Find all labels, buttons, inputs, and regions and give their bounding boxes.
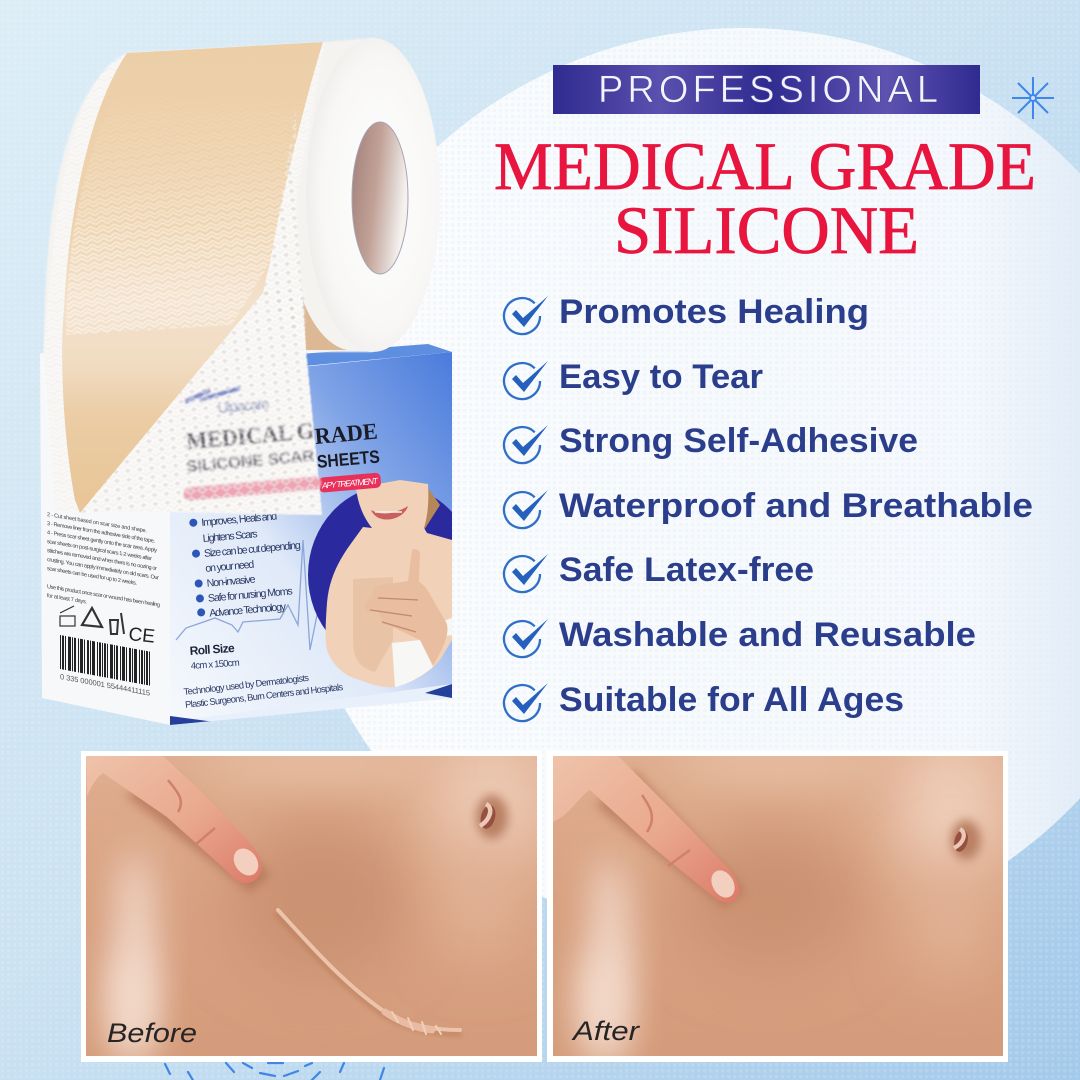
finger [553,756,745,908]
transparent film [42,42,325,515]
technology note: Plastic Surgeons, Burn Centers and Hospitals [184,681,344,710]
feature list [504,293,1033,721]
icon: period after opening [60,606,75,626]
roll body [44,38,373,515]
roll size: 4cm x 150cm [190,658,240,672]
feature bullets on box: Improves, Heals and [201,510,278,529]
barcode: 0 335 000001 55444411115 [60,672,150,698]
feature bullets on box: Safe for nursing Moms [207,585,293,605]
roll end disc [306,38,440,352]
label: before: Before [107,1018,197,1048]
item: washable and reusable: Washable and Reusable [559,616,976,654]
title: SILICONE [614,192,919,268]
scar [277,910,460,1034]
icon: sparkle star [1012,77,1054,119]
roll core hole [352,122,408,274]
panel: before photo [81,730,550,1062]
box side panel: stitches are removed and when there is no oozing or [47,548,157,572]
icon: waste bin [110,613,124,634]
banner: professional [553,65,980,114]
item: strong self-adhesive: Strong Self-Adhesive [559,422,918,460]
tan backing sheet [62,42,323,513]
icon: recycling [82,608,102,627]
navel [476,795,508,839]
label: after: After [571,1016,640,1046]
box side panel: 4 - Press scar sheet gently onto the scar area. Apply [47,530,157,554]
box side panel [40,353,170,725]
decorative dashes under photos [165,1063,384,1080]
box title right part: APY TREATMENT [321,476,379,491]
box front panel [170,352,476,730]
ecg line [176,540,320,650]
box title right part: RADE [314,419,379,449]
product box [40,344,476,730]
roll size [190,644,240,669]
feature bullets on box: Lightens Scars [202,528,258,545]
item: safe latex-free: Safe Latex-free [559,551,814,589]
box side panel: 2 - Cut sheet based on scar size and shape. [47,512,147,535]
title: MEDICAL GRADE [494,128,1036,204]
feature bullets on box: Advance Technology [209,601,287,620]
woman portrait [308,480,452,688]
box title right part [314,419,382,493]
box side panel: scar sheets on post-surgical scars 1-2 weeks after [47,539,152,562]
box side panel: scar sheets can be used for up to 2 weeks. [47,566,137,587]
feature bullets on box [189,513,300,617]
panel: after photo [547,735,1008,1065]
box side panel: for at least 7 days. [47,593,87,606]
item: waterproof and breathable: Waterproof and Breathable [559,487,1033,525]
finger [86,756,270,892]
navel [951,820,981,860]
item: promotes healing: Promotes Healing [559,293,869,331]
feature bullets on box: Non-invasive [206,574,256,590]
box title right part: SHEETS [316,446,381,472]
box side panel: crusting. You can apply immediately on old scars. Our [47,557,159,581]
roll size: Roll Size [189,641,235,658]
box top face [300,344,452,366]
blurred box text under film: MEDICAL G [185,418,315,454]
box side panel: Use this product once scar or wound has been healing [47,584,160,609]
item: easy to tear: Easy to Tear [559,358,763,396]
barcode [60,652,150,698]
title [494,128,1036,268]
silicone roll [42,38,440,515]
feature bullets on box: on your need [205,559,255,575]
exposed film mesh [80,290,322,513]
item: suitable for all ages: Suitable for All Ages [559,681,904,719]
feature bullets on box: Size can be cut depending [204,539,301,560]
blurred box text under film [185,388,315,494]
CE mark: CE [127,624,156,648]
blurred box text under film: Ulpacare [217,396,270,417]
blurred box text under film: SILICONE SCAR [186,448,315,476]
decorative white circle [287,28,1080,944]
box side panel: 3 - Remove liner from the adhesive side of the tape. [47,521,155,545]
technology note: Technology used by Dermatologists [183,672,310,697]
banner: professional: PROFESSIONAL [598,69,938,111]
